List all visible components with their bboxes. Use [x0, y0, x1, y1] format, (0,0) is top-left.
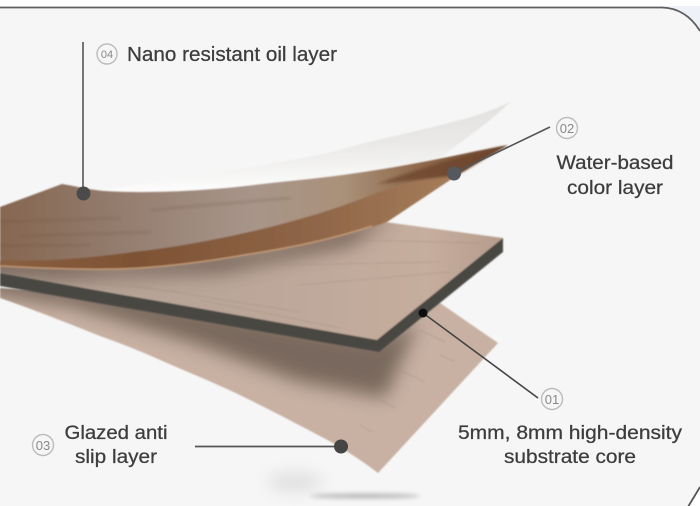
dark upper-right streak: [377, 146, 506, 184]
callout 03: glazed anti slip layer: Glazed anti: [64, 423, 168, 444]
callout 04: nano resistant oil layer: Nano resistant oil layer: [127, 44, 337, 66]
callout 01: substrate core: 01: [545, 392, 559, 407]
callout 02: water-based color layer: [447, 118, 674, 199]
top layer peel: white film: [85, 102, 510, 198]
callout 01: substrate core: 5mm, 8mm high-density: [458, 423, 683, 444]
callout 04: nano resistant oil layer: [76, 42, 337, 200]
callout 01: substrate core: [418, 308, 683, 468]
callout 01: substrate core: substrate core: [504, 447, 636, 468]
bottom layer: glazed anti slip layer: [0, 287, 498, 474]
callout 04: nano resistant oil layer: 04: [101, 49, 113, 61]
middle board: high-density substrate core: [0, 215, 503, 352]
darker band: [0, 176, 455, 269]
floor shadow: [267, 473, 420, 498]
top layer: wood color layer: [0, 145, 508, 269]
callout 02: water-based color layer: 02: [560, 121, 574, 136]
callout 03: glazed anti slip layer: 03: [36, 438, 50, 453]
light edge: [0, 226, 372, 269]
callout 03: glazed anti slip layer: [32, 423, 348, 468]
callout 02: water-based color layer: Water-based: [556, 153, 674, 174]
callout 03: glazed anti slip layer: slip layer: [75, 447, 158, 468]
callout 02: water-based color layer: color layer: [567, 178, 664, 199]
